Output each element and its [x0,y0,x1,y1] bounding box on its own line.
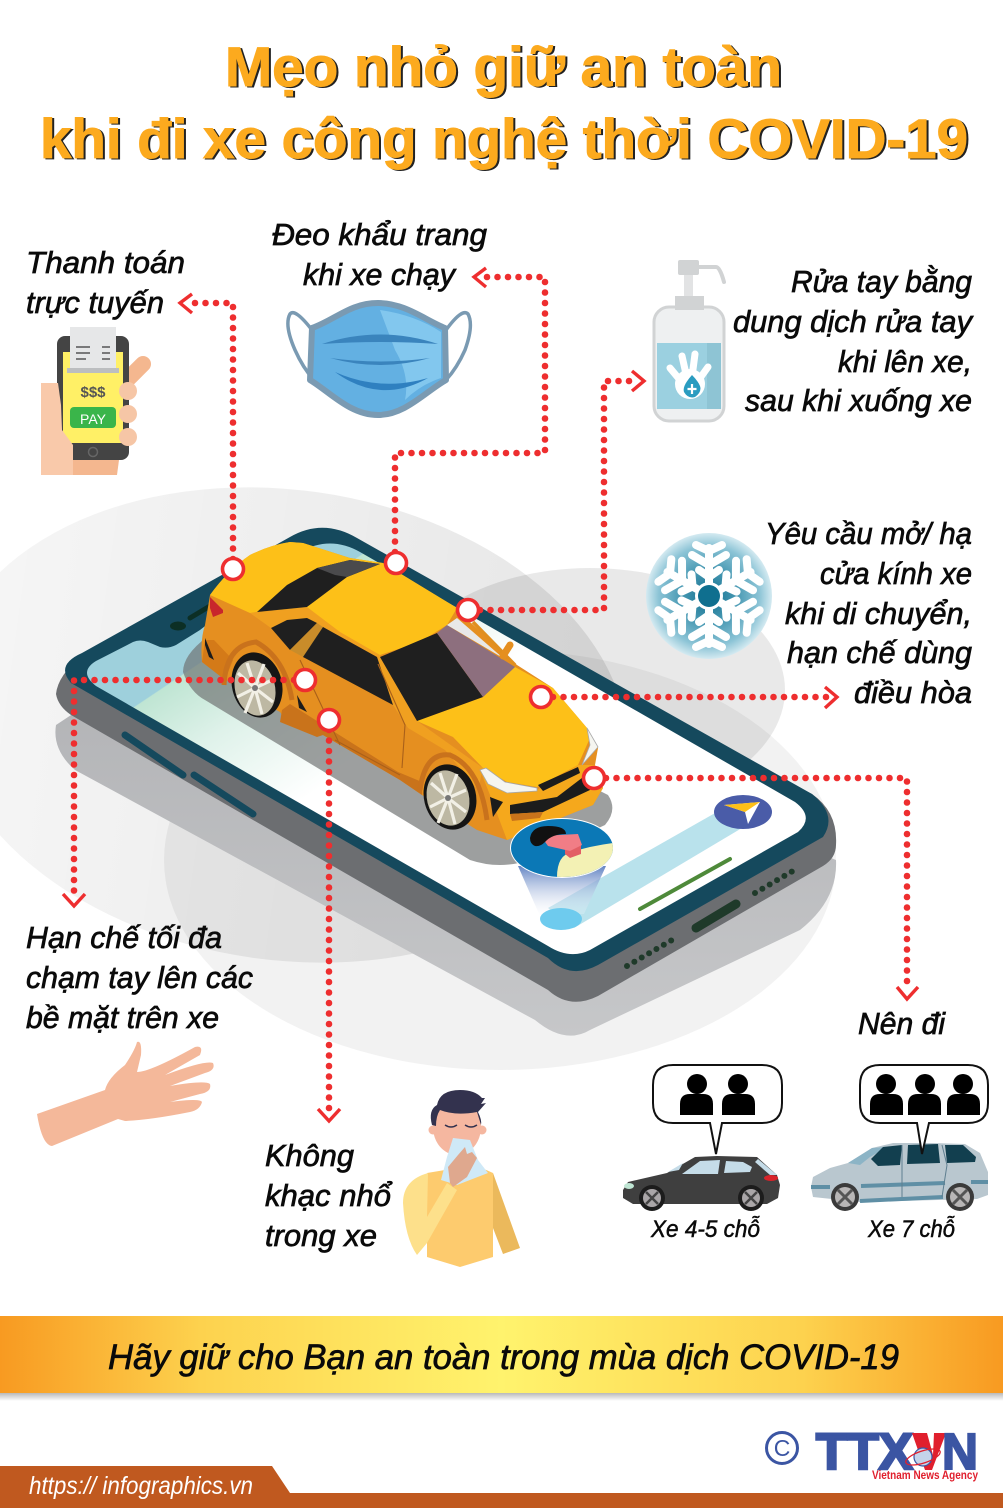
title: Mẹo nhỏ giữ an toàn [227,36,784,99]
fog vent [490,797,503,817]
front bumper [480,765,603,840]
logo: copyright and agency mark: N [942,1423,978,1480]
car body [201,542,603,840]
side mirror [503,645,510,656]
title [40,35,970,171]
rear vent [205,638,214,660]
text: wash hands: sau khi xuống xe [745,383,972,418]
phone illustration [55,528,836,1036]
phone screen [87,544,806,954]
text: wash hands: Rửa tay bằng [791,264,972,299]
lower grille [510,768,595,814]
text: wash hands [733,264,974,418]
connector: no spitting [318,730,340,1121]
side sill [280,704,422,795]
upper shoulder [250,607,483,790]
front camera [170,606,210,630]
icon: phone payment: PAY [80,411,107,427]
text: limit touching: bề mặt trên xe [26,1000,219,1035]
text: limit touching: chạm tay lên các [26,960,253,995]
icon: coughing man [403,1090,520,1267]
connector: touching surfaces [63,680,294,906]
text: online payment: trực tuyến [26,285,164,320]
windshield [380,633,483,721]
icon: minivan [811,1143,988,1211]
route band [548,800,752,928]
text: car 4-5 seats: Xe 4-5 chỗ [650,1215,760,1243]
rear lower skirt [202,640,233,680]
text: no spitting [265,1138,393,1253]
text: wear mask: khi xe chạy [303,257,457,292]
icon: hatchback car [623,1156,780,1211]
passenger bubble [510,818,614,880]
speaker slots [125,735,253,814]
front wheel arch [420,755,487,820]
car [201,542,603,840]
text: open windows: điều hòa [854,675,972,710]
side headlight [582,728,598,765]
car ground shadow [183,637,612,865]
background shadow shapes [0,444,836,1070]
logo: copyright and agency mark: TTX [816,1423,913,1480]
rear wheel arch [224,642,292,700]
rear wheel [225,647,289,723]
door line [300,660,405,775]
logo: copyright and agency mark: Vietnam News Agency [872,1470,979,1482]
headlight [480,768,537,793]
charging port [696,904,736,928]
connector: online payment [180,294,233,559]
upper grille [538,767,580,791]
banner text: Hãy giữ cho Bạn an toàn trong mùa dịch COVID-19 [108,1338,899,1377]
phone side [56,545,836,1002]
connector: hand sanitizer [480,371,644,610]
text: limit touching [26,920,253,1035]
rear window [257,560,380,612]
rear side window [271,618,317,650]
door window [303,627,393,705]
connector: passengers [606,778,918,999]
text: wear mask [272,217,487,292]
start point [540,908,582,930]
icon: phone payment: $$$ [80,384,106,401]
banner [0,1316,1003,1401]
text: online payment [26,245,185,320]
rear window glare [317,560,380,577]
icon: snowflake [646,533,772,659]
rear deck [210,542,383,613]
icon: face mask [288,303,470,415]
A-pillar [473,622,515,665]
windshield glare [447,618,503,658]
connector nodes [222,552,604,788]
connector: windows [553,687,837,708]
text: wash hands: khi lên xe, [838,344,972,379]
route green line [640,859,730,909]
hood and fender [417,667,590,787]
title: khi đi xe công nghệ thời COVID-19 [42,108,970,171]
text: no spitting: khạc nhổ [265,1178,393,1213]
rear fender vent [297,695,307,712]
text: car 7 seats: Xe 7 chỗ [867,1215,955,1243]
text: open windows: hạn chế dùng [787,635,972,670]
text: wash hands: dung dịch rửa tay [733,304,974,339]
text: open windows [765,516,972,710]
logo: copyright and agency mark: C [774,1435,790,1461]
speech bubble: three passengers [860,1065,988,1154]
text: limit touching: Hạn chế tối đa [26,920,222,955]
text: online payment: Thanh toán [26,245,185,280]
tail light [210,597,223,617]
footer bar [0,1466,1003,1508]
windshield reflection [437,625,515,697]
title: Mẹo nhỏ giữ an toàn [225,35,782,98]
text: open windows: cửa kính xe [820,556,972,591]
text: no spitting: trong xe [265,1218,377,1253]
footer url: https:// infographics.vn [29,1472,253,1500]
window pillar [290,623,323,657]
speaker grilles [627,868,798,966]
front wheel [417,759,483,835]
chin lip [510,812,543,821]
phone front frame [65,528,828,971]
icon: sanitizer bottle [654,260,724,421]
title: khi đi xe công nghệ thời COVID-19 [40,107,968,170]
text: no spitting: Không [265,1138,354,1173]
phone cast shadow [55,610,836,1036]
connector: mask [395,268,545,552]
text: wear mask: Đeo khẩu trang [272,217,487,252]
text: open windows: Yêu cầu mở/ hạ [765,516,972,551]
icon: phone payment [41,327,143,475]
roof [307,563,457,655]
text: should travel: Nên đi [858,1006,946,1041]
speech bubble: two passengers [653,1065,782,1154]
location cone [518,866,606,916]
navigation marker [714,795,772,829]
logo: copyright and agency mark [766,1423,979,1482]
icon: hand [37,1042,214,1146]
text: open windows: khi di chuyển, [785,596,972,631]
